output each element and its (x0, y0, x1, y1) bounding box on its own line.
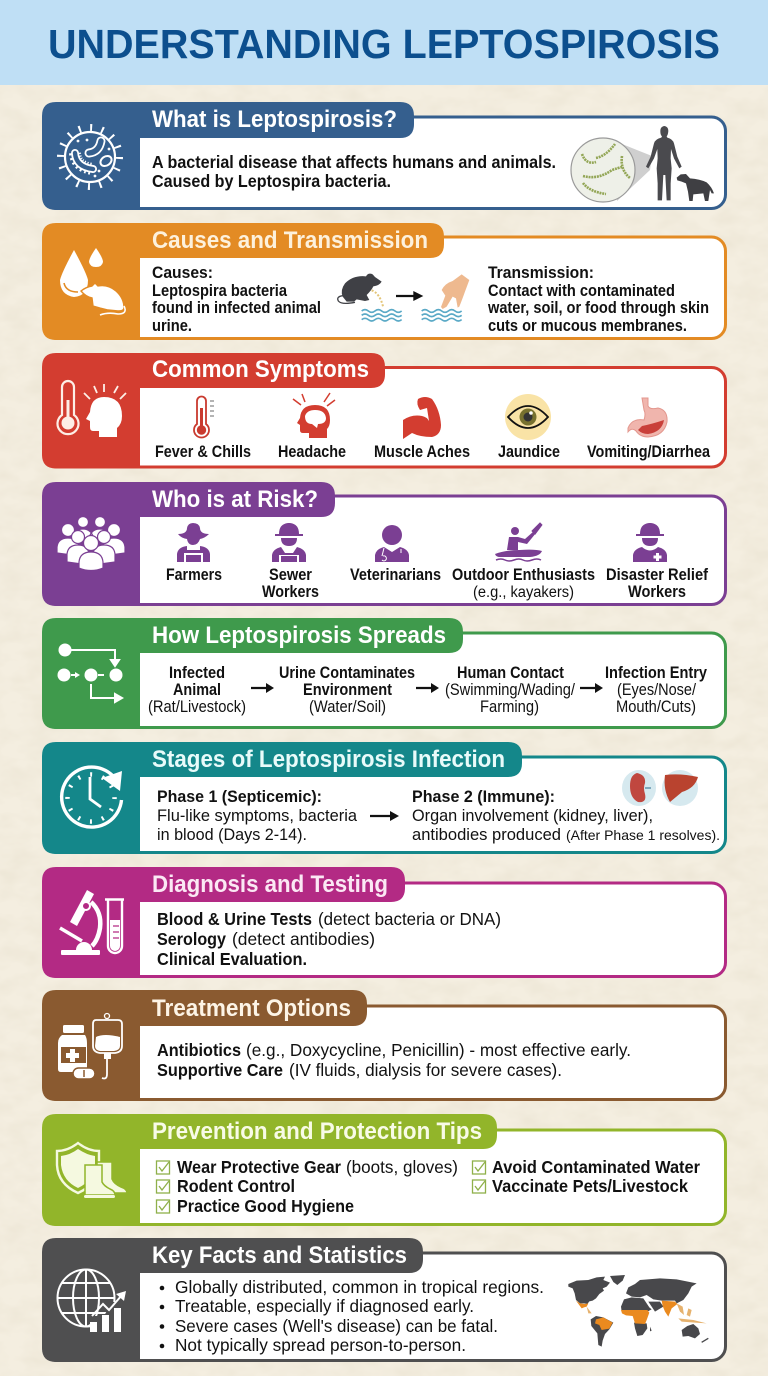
risk group: farmers: Farmers (166, 566, 222, 584)
transmission text: Transmission: (488, 264, 594, 282)
arrow (416, 683, 439, 693)
checklist: left column: (boots, gloves) (346, 1157, 458, 1177)
symptom: jaundice: Jaundice (498, 443, 560, 461)
step: infected animal: Animal (173, 681, 221, 699)
risk group: veterinarians (350, 525, 441, 584)
step: infected animal: (Rat/Livestock) (148, 698, 246, 716)
icon: group of people (57, 516, 125, 570)
symptom: fever and chills (155, 396, 251, 461)
icon: water drops and rat (60, 248, 125, 315)
treatment text: Supportive Care (157, 1060, 283, 1080)
panel: what is leptospirosis (42, 102, 726, 210)
transmission text: Contact with contaminated (488, 282, 675, 300)
panel: treatment options (42, 990, 726, 1101)
symptom: muscle aches: Muscle Aches (374, 443, 470, 461)
checklist: left column (156, 1157, 458, 1216)
arrow (251, 683, 274, 693)
icon: kidney (622, 770, 656, 806)
icon: microscope and test tube (60, 890, 124, 955)
treatment text (157, 1040, 631, 1080)
title banner: UNDERSTANDING LEPTOSPIROSIS (48, 21, 720, 67)
treatment text: Antibiotics (157, 1040, 241, 1060)
symptom: muscle aches (374, 397, 470, 461)
symptom: vomiting and diarrhea: Vomiting/Diarrhea (587, 443, 711, 461)
diagnosis text: (detect bacteria or DNA) (318, 909, 501, 929)
facts bullet list (160, 1277, 544, 1355)
panel: prevention and protection tips (42, 1114, 726, 1226)
panel: common symptoms (42, 353, 726, 468)
phase 1 text: Phase 1 (Septicemic): (157, 787, 322, 806)
heading: prevention and protection tips: Prevention and Protection Tips (152, 1118, 482, 1145)
step: human contact (445, 664, 575, 716)
step: infected animal: Infected (169, 664, 225, 682)
map: global distribution (568, 1275, 708, 1347)
facts bullet list: Treatable, especially if diagnosed early. (175, 1296, 474, 1316)
heading: diagnosis and testing: Diagnosis and Testing (152, 871, 388, 898)
icon: clock with arrow (62, 767, 122, 827)
step: urine contaminates environment (279, 664, 415, 716)
step: infected animal (148, 664, 246, 716)
description text: Caused by Leptospira bacteria. (152, 171, 391, 191)
description text (152, 152, 556, 191)
transmission text (487, 264, 709, 335)
icon: globe with growth chart (58, 1270, 127, 1336)
panel: key facts and statistics (42, 1238, 726, 1362)
step: urine contaminates environment: Urine Contaminates (279, 664, 415, 682)
icon: thermometer and head (58, 381, 126, 437)
step: infection entry: (Eyes/Nose/ (617, 681, 696, 699)
phase 1 text: in blood (Days 2-14). (157, 825, 307, 844)
step: infection entry: Infection Entry (605, 664, 708, 682)
step: human contact: (Swimming/Wading/ (445, 681, 575, 699)
heading: key facts and statistics: Key Facts and Statistics (152, 1242, 407, 1269)
checklist: right column: Vaccinate Pets/Livestock (492, 1176, 688, 1196)
facts bullet list: Severe cases (Well's disease) can be fatal. (175, 1316, 498, 1336)
causes text: Causes: (152, 264, 213, 282)
step: human contact: Human Contact (457, 664, 564, 682)
symptom: fever and chills: Fever & Chills (155, 443, 251, 461)
description text: A bacterial disease that affects humans and animals. (152, 152, 556, 172)
phase 2 text (412, 787, 720, 844)
symptom: headache (278, 393, 346, 461)
risk group: outdoor enthusiasts: Outdoor Enthusiasts (452, 566, 595, 584)
risk group: outdoor enthusiasts (452, 524, 595, 601)
risk group: sewer workers: Sewer (269, 566, 313, 584)
arrow (370, 811, 399, 821)
panel: diagnosis and testing (42, 867, 726, 978)
heading: causes and transmission: Causes and Transmission (152, 227, 428, 254)
phase 1 text (157, 787, 358, 844)
risk group: farmers (166, 523, 222, 584)
risk group: veterinarians: Veterinarians (350, 566, 441, 584)
causes text: found in infected animal (152, 299, 321, 317)
symptom: vomiting and diarrhea (587, 398, 711, 461)
risk group: outdoor enthusiasts: (e.g., kayakers) (473, 584, 574, 601)
symptom: jaundice (498, 394, 560, 461)
transmission text: cuts or mucous membranes. (488, 317, 687, 335)
checklist: right column: Avoid Contaminated Water (492, 1157, 700, 1177)
step: infection entry (605, 664, 708, 716)
illustration: rat urine contaminating water and hand contact (338, 274, 469, 321)
checklist: left column: Practice Good Hygiene (177, 1196, 354, 1216)
diagnosis text: Blood & Urine Tests (157, 909, 312, 929)
phase 2 text: Organ involvement (kidney, liver), (412, 806, 653, 825)
treatment text: (e.g., Doxycycline, Penicillin) - most effective early. (246, 1040, 631, 1060)
risk group: sewer workers (262, 523, 319, 601)
treatment text: (IV fluids, dialysis for severe cases). (289, 1060, 562, 1080)
illustration: magnified bacteria with human and dog (571, 126, 714, 202)
step: urine contaminates environment: Environment (303, 681, 392, 699)
risk group: disaster relief workers: Disaster Relief (606, 566, 708, 584)
checklist: left column: Rodent Control (177, 1176, 295, 1196)
heading: common symptoms: Common Symptoms (152, 356, 369, 383)
heading: how leptospirosis spreads: How Leptospirosis Spreads (152, 622, 446, 649)
causes text (152, 264, 321, 335)
risk group: disaster relief workers (606, 523, 708, 601)
step: human contact: Farming) (480, 698, 539, 716)
checklist: left column: Wear Protective Gear (177, 1157, 341, 1177)
phase 1 text: Flu-like symptoms, bacteria (157, 806, 358, 825)
diagnosis text: Serology (157, 929, 226, 949)
diagnosis text: (detect antibodies) (232, 929, 375, 949)
phase 2 text: (After Phase 1 resolves). (566, 827, 720, 843)
diagnosis text: Clinical Evaluation. (157, 949, 307, 969)
panel: who is at risk (42, 482, 726, 606)
risk group: disaster relief workers: Workers (628, 583, 686, 601)
checklist: right column (472, 1157, 700, 1196)
symptom: headache: Headache (278, 443, 346, 461)
phase 2 text: Phase 2 (Immune): (412, 787, 555, 806)
phase 2 text: antibodies produced (412, 825, 561, 844)
heading: treatment options: Treatment Options (152, 995, 351, 1022)
heading: who is at risk: Who is at Risk? (152, 486, 318, 513)
transmission text: water, soil, or food through skin (487, 299, 709, 317)
icon: shield and boots (57, 1143, 127, 1198)
heading: stages of infection: Stages of Leptospirosis Infection (152, 746, 505, 773)
icon: flow diagram (58, 644, 122, 702)
icon: medicine bottle and iv bag (58, 1014, 122, 1079)
heading: what is leptospirosis: What is Leptospirosis? (152, 106, 397, 133)
facts bullet list: Not typically spread person-to-person. (175, 1335, 466, 1355)
panel: how leptospirosis spreads (42, 618, 726, 729)
title banner (0, 0, 768, 85)
causes text: Leptospira bacteria (152, 282, 288, 300)
diagnosis text (157, 909, 501, 969)
icon: liver (662, 770, 698, 806)
icon: bacteria (60, 128, 120, 186)
panel: stages of infection (42, 742, 726, 854)
step: urine contaminates environment: (Water/Soil) (309, 698, 386, 716)
risk group: sewer workers: Workers (262, 583, 319, 601)
panel: causes and transmission (42, 223, 726, 340)
causes text: urine. (152, 317, 192, 335)
facts bullet list: Globally distributed, common in tropical regions. (175, 1277, 544, 1297)
arrow (580, 683, 603, 693)
step: infection entry: Mouth/Cuts) (616, 698, 696, 716)
